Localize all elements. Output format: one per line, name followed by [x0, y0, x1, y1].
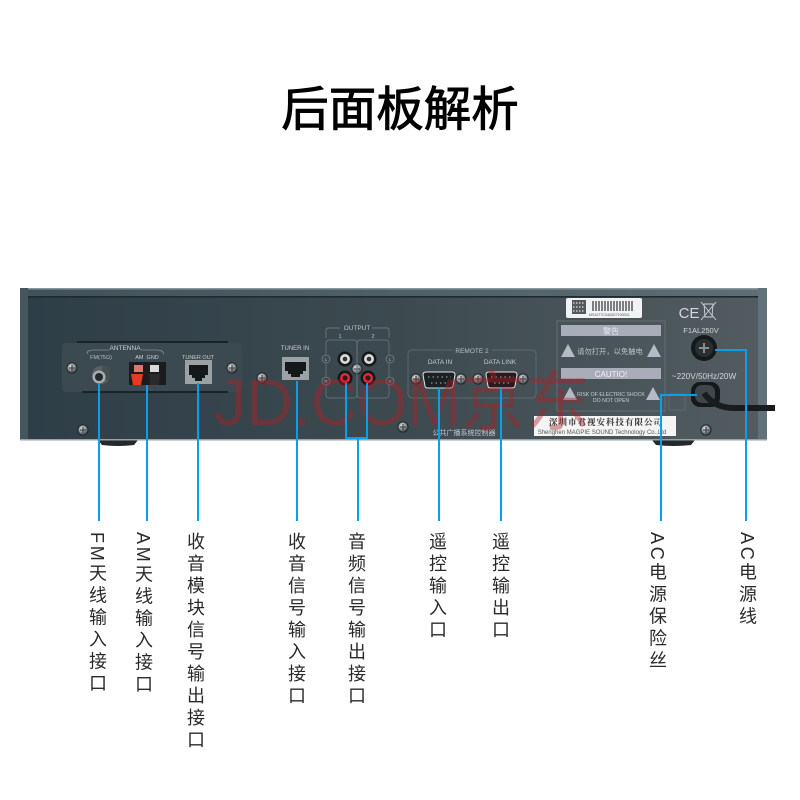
output jacks: 1: [338, 334, 342, 340]
label: remote output: 遥控输出口: [490, 532, 510, 642]
FM connector: [92, 366, 110, 384]
company label: 深圳市君视安科技有限公司: [549, 417, 663, 427]
warning label: RISK OF ELECTRIC SHOCK: [577, 392, 645, 398]
watermark: JD.COM京东: [214, 365, 590, 439]
output jacks: L: [325, 357, 328, 362]
remote section: DATA IN: [428, 359, 452, 366]
certification marks: CE: [679, 305, 699, 322]
label: AC fuse: AC 电源保险丝: [647, 532, 667, 673]
label: remote input: 遥控输入口: [427, 532, 447, 642]
company label: Shenghen MAGPIE SOUND Technology Co.,Ltd: [538, 430, 666, 436]
output jacks: 2: [371, 334, 375, 340]
tuner in port: [281, 346, 309, 380]
output jacks: R: [388, 379, 392, 384]
product name: 公共广播系统控制器: [432, 428, 496, 437]
label: AC power cord: AC 电源线: [737, 532, 757, 629]
power cord: [669, 372, 775, 410]
warning label: 警告: [603, 326, 619, 336]
label: FM antenna input: FM 天线输入接口: [87, 532, 107, 696]
antenna panel: TUNER OUT: [182, 355, 215, 361]
label: AM antenna input: AM 天线输入接口: [133, 532, 153, 697]
tuner in port: TUNER IN: [281, 346, 309, 352]
label: tuner module output: 收音模块信号输出接口: [185, 532, 205, 752]
warning label: DO NOT OPEN: [593, 398, 629, 404]
fuse holder: [683, 326, 719, 361]
antenna panel: AM GND: [135, 355, 159, 361]
output jacks: OUTPUT: [344, 325, 370, 332]
output jacks: [322, 325, 394, 398]
warning label: [557, 321, 665, 411]
device chassis: [20, 288, 767, 440]
remote section: DATA LINK: [484, 359, 517, 366]
antenna panel: FM(75Ω): [90, 355, 112, 361]
remote section: REMOTE 2: [455, 348, 489, 355]
warning label: CAUTIO!: [595, 370, 627, 379]
antenna panel: [62, 341, 242, 393]
barcode label: MS1677C0463D7100001: [589, 313, 630, 317]
fuse holder: F1AL250V: [683, 326, 719, 335]
remote section: [408, 346, 536, 398]
company label: [534, 416, 676, 436]
label: audio signal output: 音频信号输出接口: [346, 532, 366, 708]
panel screws: [66, 362, 712, 436]
output jacks: L: [389, 357, 392, 362]
barcode label: [566, 298, 642, 318]
callout lines: [99, 350, 746, 521]
title: 后面板解析: [281, 71, 519, 140]
certification marks: [679, 302, 716, 322]
output jacks: R: [324, 379, 328, 384]
label: tuner signal input: 收音信号输入接口: [286, 532, 306, 708]
warning label: 请勿打开，以免触电: [577, 347, 644, 356]
AM terminals: [129, 362, 166, 385]
device feet: [98, 440, 695, 446]
tuner out port: [185, 360, 212, 384]
power cord: ~220V/50Hz/20W: [672, 372, 736, 381]
antenna heading: ANTENNA: [109, 345, 141, 352]
